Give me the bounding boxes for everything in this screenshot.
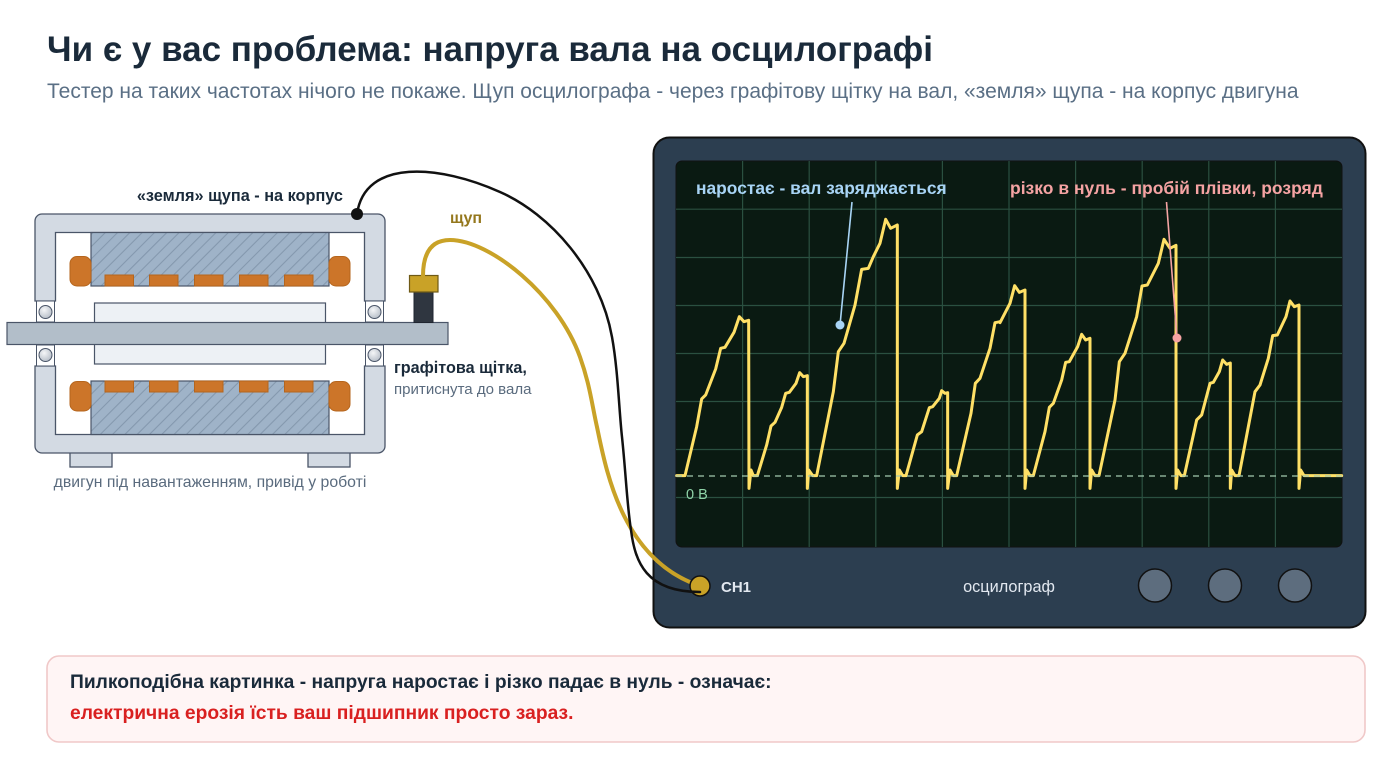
annotation: rising voltage (696, 178, 947, 330)
oscilloscope screen (676, 161, 1342, 547)
subtitle: Тестер на таких частотах нічого не покаже. Щуп осцилографа - через графітову щітку на вал, «земля» щупа - на корпус двигуна (47, 80, 1299, 103)
motor feet (70, 452, 350, 467)
oscilloscope body (654, 138, 1366, 628)
callout line 1: Пилкоподібна картинка - напруга наростає і різко падає в нуль - означає: (70, 672, 772, 693)
annotation: sharp drop (1010, 178, 1323, 342)
stator core (91, 232, 329, 434)
brush holder (410, 276, 438, 292)
zero line (676, 475, 1342, 477)
title: Чи є у вас проблема: напруга вала на осцилографі (47, 30, 933, 69)
probe wire (423, 240, 700, 586)
knobs (1138, 569, 1312, 602)
voltage trace (677, 219, 1342, 488)
graphite brush (414, 292, 433, 322)
callout (47, 656, 1365, 742)
label: graphite brush (394, 359, 532, 398)
ground clip point (351, 208, 363, 220)
motor housing (35, 214, 385, 453)
label: probe: щуп (450, 210, 482, 227)
label: graphite brush: графітова щітка, (394, 359, 527, 377)
annotation: rising voltage: наростає - вал заряджається (696, 178, 947, 198)
oscilloscope (654, 138, 1366, 628)
CH1 connector (690, 576, 710, 596)
label: ground clip: «земля» щупа - на корпус (137, 187, 343, 205)
motor cross-section (7, 214, 448, 467)
shaft (7, 322, 448, 344)
label: graphite brush: притиснута до вала (394, 381, 532, 398)
stator slots with copper windings (105, 275, 313, 392)
oscilloscope label: осцилограф (963, 578, 1055, 596)
callout line 2: електрична ерозія їсть ваш підшипник просто зараз. (70, 703, 573, 724)
caption: motor: двигун під навантаженням, привід у роботі (54, 474, 366, 491)
CH1 label: CH1 (721, 579, 751, 596)
rotor (94, 303, 326, 364)
bearings (36, 301, 384, 366)
ground wire (357, 172, 700, 592)
end windings (70, 256, 350, 411)
annotation: sharp drop: різко в нуль - пробій плівки, розряд (1010, 178, 1323, 198)
zero label: 0 В (686, 487, 708, 503)
